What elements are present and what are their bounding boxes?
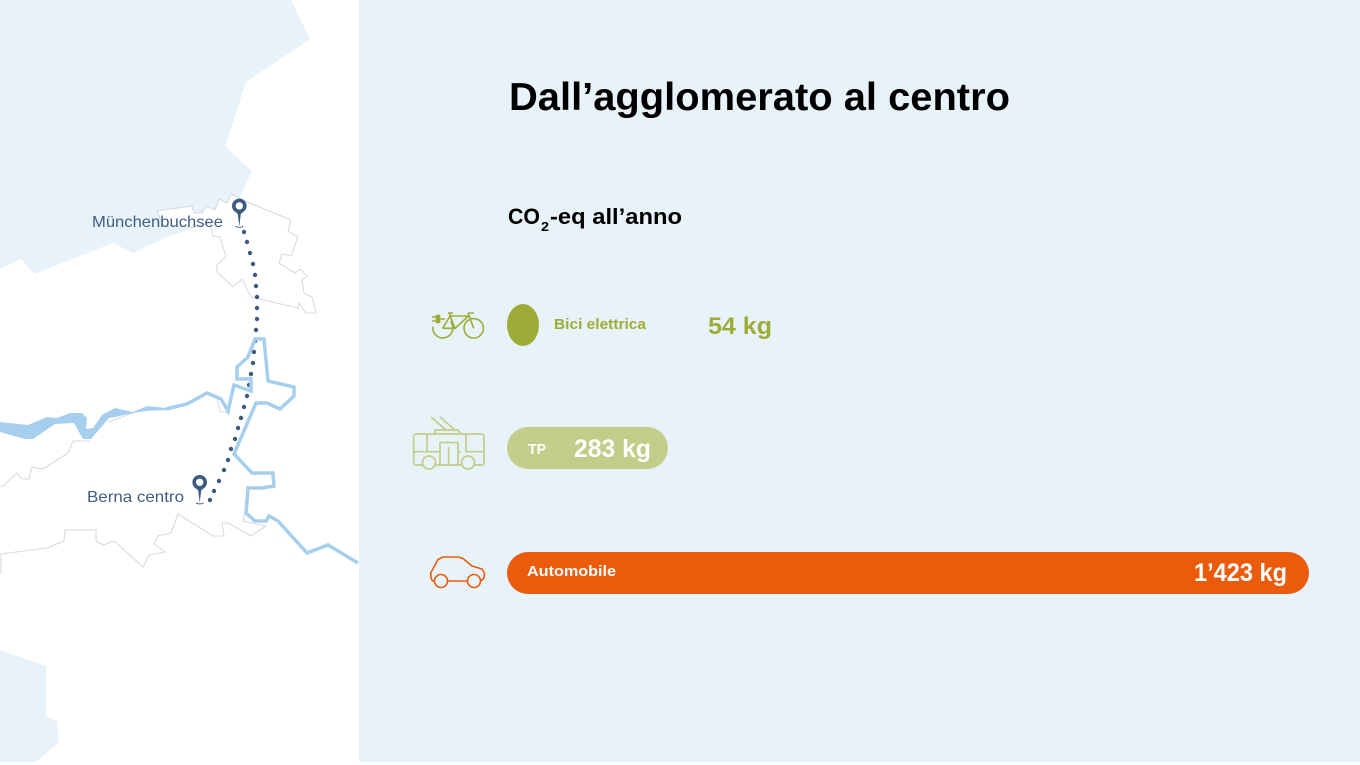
- icon: pin Münchenbuchsee: [234, 200, 245, 227]
- value: 283 kg: 283 kg: [574, 435, 651, 463]
- row: e-bike: [432, 304, 772, 346]
- subtitle: -eq all’anno: [550, 204, 682, 229]
- map: grey boundaries: [0, 377, 266, 574]
- title: Dall’agglomerato al centro: [509, 76, 1010, 119]
- icon: car: [431, 557, 484, 588]
- bar: car: [507, 552, 1309, 594]
- row: car: [431, 552, 1309, 594]
- label: Bici elettrica: Bici elettrica: [554, 316, 647, 333]
- map: [0, 0, 358, 762]
- icon: pin Berna centro: [194, 477, 205, 504]
- label: Automobile: Automobile: [527, 563, 616, 580]
- row: public transport: [414, 417, 668, 469]
- subtitle: 2: [541, 219, 549, 234]
- value: 1’423 kg: 1’423 kg: [1194, 559, 1287, 587]
- subtitle: CO: [508, 204, 540, 229]
- map: river line: [166, 339, 358, 563]
- label: TP: TP: [528, 441, 546, 458]
- panel: right background: [359, 0, 1360, 762]
- label: Münchenbuchsee: Münchenbuchsee: [92, 214, 223, 231]
- map: dotted route: [208, 230, 259, 502]
- map: lower light-blue area: [0, 650, 59, 762]
- bar: e-bike: [507, 304, 539, 346]
- label: Berna centro: Berna centro: [87, 489, 184, 506]
- icon: trolleybus: [414, 417, 484, 469]
- map: river wide section: [0, 406, 166, 439]
- value: 54 kg: 54 kg: [708, 313, 772, 340]
- icon: electric bicycle: [432, 313, 483, 338]
- bar: public transport: [507, 427, 668, 469]
- map: upper light-blue area: [0, 0, 310, 274]
- map: Münchenbuchsee municipal outline: [157, 194, 316, 313]
- subtitle: [508, 204, 682, 234]
